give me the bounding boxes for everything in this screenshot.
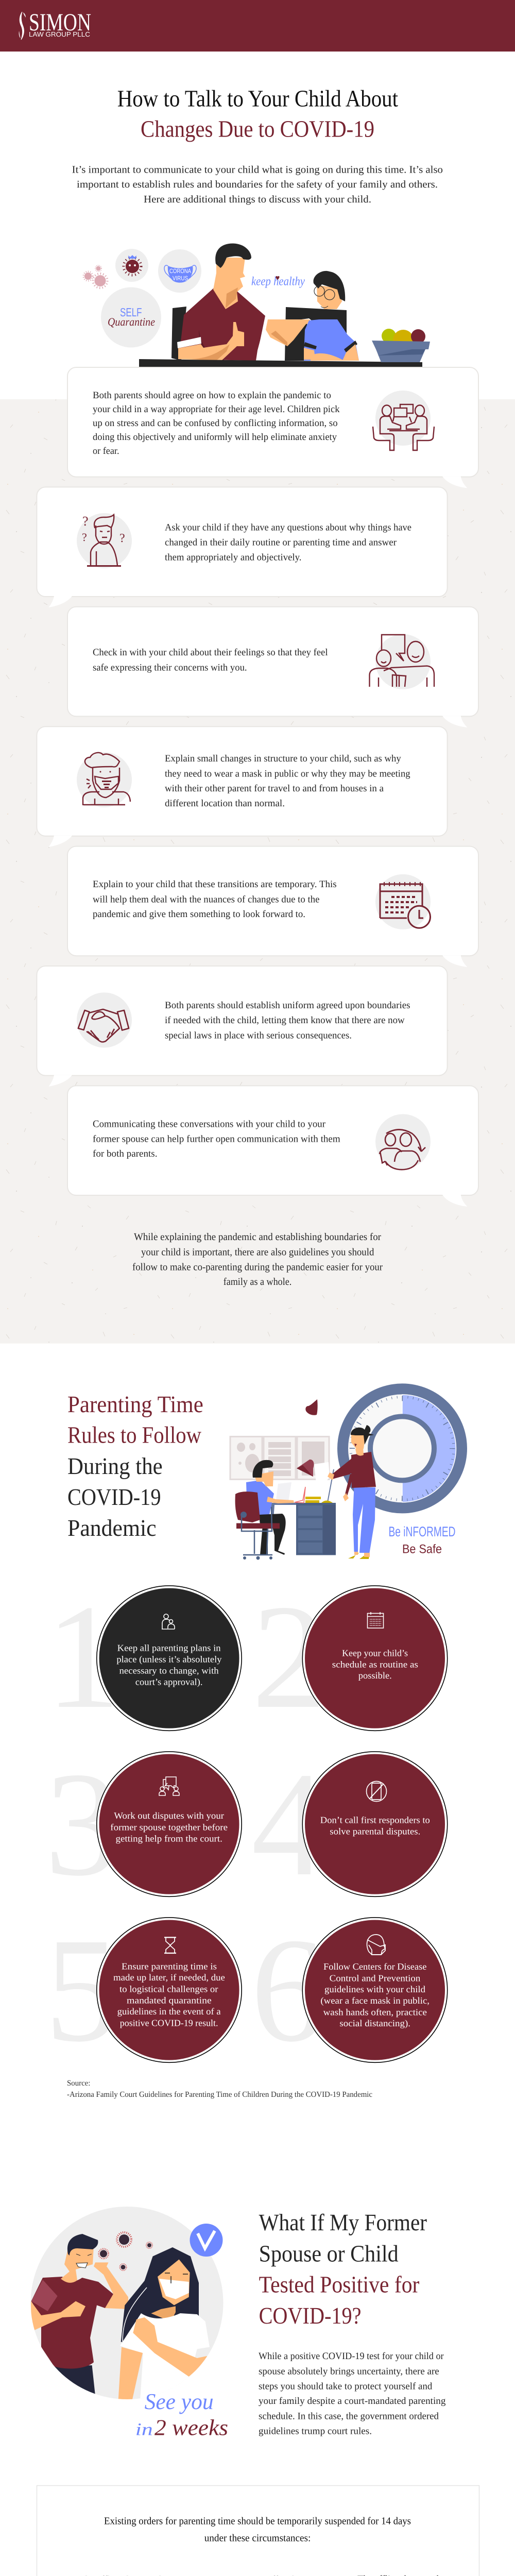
- card 2 text: [165, 522, 411, 563]
- rule 5 text: to logistical challenges or: [119, 1984, 218, 1994]
- icon: confused child: ?: [82, 514, 89, 529]
- card 5 text: pandemic and give them something to look forward to.: [93, 909, 305, 920]
- rule 5 text: Ensure parenting time is: [122, 1961, 217, 1971]
- icon: confused child: ?: [119, 532, 125, 545]
- card 7 text: former spouse can help further open communication with them: [93, 1133, 340, 1144]
- card 1 text: Both parents should agree on how to explain the pandemic to: [93, 390, 331, 401]
- rule 6 text: guidelines with your child: [324, 1984, 425, 1994]
- rule 5 text: [113, 1961, 225, 2028]
- icon: small viruses: [83, 265, 107, 288]
- heading: parenting time rules: COVID-19: [67, 1484, 161, 1510]
- background digits: 2: [252, 1574, 327, 1739]
- icon: corona virus mask bubble: VIRUS: [173, 275, 188, 282]
- closing text: While explaining the pandemic and establishing boundaries for: [134, 1231, 381, 1243]
- icon: hourglass: [164, 1937, 176, 1953]
- text: uncertainty paragraph: While a positive COVID-19 test for your child or: [259, 2351, 444, 2362]
- heading: parenting time rules: Pandemic: [67, 1515, 157, 1541]
- text: uncertainty paragraph: [259, 2351, 446, 2436]
- icon: corona virus mask bubble: CORONA: [169, 267, 191, 275]
- box heading: under these circumstances:: [204, 2533, 311, 2544]
- text: uncertainty paragraph: your family despite a court-mandated parenting: [259, 2396, 446, 2406]
- be informed lettering: Be Safe: [402, 1543, 442, 1556]
- rule 1 text: place (unless it’s absolutely: [116, 1654, 221, 1664]
- box heading: Existing orders for parenting time should be temporarily suspended for 14 days: [104, 2515, 411, 2527]
- rule 3 text: Work out disputes with your: [114, 1810, 224, 1821]
- big clock: [337, 1383, 467, 1513]
- card 1 text: up on stress and can be confused by conflicting information, so: [93, 418, 338, 429]
- icon: self quarantine bubble: SELF: [120, 306, 142, 319]
- icon: masked head: [367, 1935, 385, 1955]
- rule 3 text: [110, 1810, 228, 1843]
- card 2 text: changed in their daily routine or parenting time and answer: [165, 537, 397, 548]
- icon: two people at table: [373, 391, 434, 450]
- woman standing: [328, 1425, 376, 1559]
- desk with drawers: [271, 1503, 336, 1555]
- icon: confused child: ?: [82, 531, 87, 544]
- text: uncertainty paragraph: schedule. In this case, the government ordered: [259, 2411, 439, 2421]
- rule 2 text: [332, 1648, 418, 1681]
- rule 6 text: wash hands often, practice: [323, 2007, 427, 2017]
- icon: check badge: [190, 2224, 222, 2257]
- card 5 text: Explain to your child that these transitions are temporary. This: [93, 879, 337, 890]
- icon: two people and arrows: [375, 1114, 431, 1170]
- rule 5 text: made up later, if needed, due: [113, 1972, 225, 1982]
- background digits: 5: [45, 1907, 119, 2073]
- rule 1 circle: [97, 1586, 242, 1731]
- rule 6 text: social distancing).: [339, 2018, 410, 2028]
- rule 2 text: possible.: [358, 1670, 392, 1681]
- see you in 2 weeks lettering: 2 weeks: [154, 2415, 228, 2441]
- rule 3 text: former spouse together before: [110, 1822, 228, 1832]
- intro text: important to establish rules and boundaries for the safety of your family and others.: [77, 179, 438, 190]
- father: [177, 243, 318, 361]
- see you in 2 weeks lettering: in: [135, 2420, 153, 2439]
- illustration: office with clock: [230, 1383, 467, 1560]
- card 1 text: your child in a way appropriate for their age level. Children pick: [93, 404, 340, 415]
- rule 4 text: [320, 1815, 430, 1837]
- illustration: couple with mask: [31, 2207, 228, 2441]
- icon: calendar and clock: [375, 874, 431, 929]
- icon: corona virus mask bubble: [158, 249, 201, 293]
- background digits: 4: [251, 1741, 326, 1907]
- rule 3 text: getting help from the court.: [115, 1833, 222, 1843]
- icon: crowned virus bubble: [115, 249, 148, 282]
- rule 5 circle: [97, 1918, 242, 2062]
- icon: self quarantine bubble: [101, 287, 161, 347]
- card 1: [67, 367, 478, 488]
- card 1 text: doing this objectively and uniformly will help eliminate anxiety: [93, 432, 337, 443]
- card 2 text: Ask your child if they have any questions about why things have: [165, 522, 411, 533]
- rule 4 circle: [302, 1752, 448, 1896]
- card 2 text: them appropriately and objectively.: [165, 552, 302, 563]
- icon: self quarantine bubble: Quarantine: [108, 315, 155, 328]
- card 4 text: with their other parent for travel to and from houses in a: [165, 783, 384, 794]
- card 7 text: [93, 1118, 340, 1159]
- heading: parenting time rules: Rules to Follow: [67, 1421, 202, 1448]
- rule 2 text: schedule as routine as: [332, 1659, 418, 1669]
- rule 4 text: solve parental disputes.: [330, 1826, 420, 1837]
- card 7 text: Communicating these conversations with your child to your: [93, 1118, 326, 1129]
- icon: handshake: [77, 992, 132, 1048]
- heading: tested positive: What If My Former: [259, 2209, 427, 2235]
- title: How to Talk to Your Child About: [117, 85, 398, 111]
- card 6: [37, 966, 448, 1087]
- rule 4 text: Don’t call first responders to: [320, 1815, 430, 1825]
- card 3 text: Check in with your child about their feelings so that they feel: [93, 647, 328, 658]
- heading: parenting time rules: During the: [67, 1453, 163, 1479]
- rule 1 text: court’s approval).: [135, 1676, 203, 1687]
- chair backs: [171, 307, 347, 361]
- child: [304, 271, 359, 361]
- card 4 text: Explain small changes in structure to your child, such as why: [165, 753, 401, 764]
- card 5 text: [93, 879, 337, 920]
- logo: Simon Law Group: SIMON: [29, 9, 91, 36]
- rule 3 circle: [97, 1752, 242, 1896]
- rule 6 text: Control and Prevention: [330, 1973, 420, 1983]
- card 5: [67, 846, 478, 967]
- source note: rules: Source:: [67, 2079, 90, 2088]
- card 6 text: special laws in place with serious consequences.: [165, 1030, 352, 1041]
- background digits: 6: [251, 1907, 325, 2073]
- heading: tested positive: Spouse or Child: [259, 2240, 399, 2266]
- card 4 text: different location than normal.: [165, 798, 285, 809]
- card 7: [67, 1086, 478, 1207]
- wall panels: [230, 1436, 329, 1479]
- intro text: Here are additional things to discuss with your child.: [144, 194, 371, 205]
- card 4 text: [165, 753, 410, 809]
- title: Changes Due to COVID-19: [141, 116, 374, 142]
- closing text: family as a whole.: [224, 1276, 291, 1287]
- panel: suspension circumstances: [37, 2485, 479, 2576]
- heading: parenting time rules: [67, 1391, 203, 1541]
- source note: rules: -Arizona Family Court Guidelines for Parenting Time of Children During the COVID-19 Pandemic: [67, 2090, 372, 2099]
- background digits: 3: [45, 1741, 119, 1907]
- see you in 2 weeks lettering: [135, 2389, 228, 2441]
- icon: parent and child: [162, 1614, 175, 1629]
- logo: Simon Law Group: LAW GROUP PLLC: [29, 30, 90, 38]
- text: uncertainty paragraph: steps you should take to protect yourself and: [259, 2381, 433, 2392]
- fruit bowl: [372, 329, 430, 362]
- heading: tested positive: COVID-19?: [259, 2302, 362, 2329]
- icon: parent and child faces: [370, 634, 434, 689]
- source note: rules: [67, 2079, 372, 2099]
- be informed lettering: Be iNFORMED: [388, 1524, 455, 1539]
- rule 6 text: (wear a face mask in public,: [320, 1995, 430, 2006]
- rule 1 text: necessary to change, with: [119, 1665, 219, 1675]
- paper background: section one: [0, 399, 515, 1344]
- logo: Simon Law Group: [19, 9, 91, 40]
- card 1 text: or fear.: [93, 446, 119, 456]
- card 3: [67, 607, 478, 727]
- box heading: [104, 2515, 411, 2544]
- card 6 text: Both parents should establish uniform agreed upon boundaries: [165, 1000, 410, 1011]
- be informed lettering: [388, 1524, 455, 1556]
- rule 5 text: mandated quarantine: [127, 1995, 212, 2005]
- woman in mask: [118, 2247, 210, 2401]
- rule 1 text: [116, 1642, 221, 1687]
- card 6 text: [165, 1000, 410, 1041]
- illustration: father talking with child: [83, 243, 430, 367]
- coughing man: [31, 2234, 128, 2396]
- rule 6 circle: [302, 1918, 448, 2062]
- background digits: 1: [46, 1574, 121, 1739]
- rule 5 text: positive COVID-19 result.: [120, 2018, 218, 2028]
- rule 1 text: Keep all parenting plans in: [117, 1642, 221, 1653]
- card 2: [37, 487, 448, 607]
- icon: masked person: [77, 752, 132, 807]
- intro text: [72, 164, 443, 205]
- heading: tested positive: Tested Positive for: [259, 2271, 419, 2298]
- rule 6 text: [320, 1961, 430, 2028]
- header band: [0, 0, 515, 52]
- rule 2 circle: [302, 1586, 448, 1731]
- card 3 text: safe expressing their concerns with you.: [93, 662, 247, 673]
- background circle: [31, 2207, 224, 2399]
- rule 2 text: Keep your child’s: [342, 1648, 408, 1658]
- closing text: follow to make co-parenting during the pandemic easier for your: [132, 1261, 383, 1273]
- heading: tested positive: [259, 2209, 427, 2329]
- text: uncertainty paragraph: spouse absolutely brings uncertainty, there are: [259, 2366, 439, 2377]
- icon: viruses: [99, 2232, 152, 2270]
- see you in 2 weeks lettering: See you: [145, 2389, 214, 2414]
- icon: confused child: [77, 513, 132, 568]
- lamp and desk items: [276, 1460, 334, 1503]
- closing text: [132, 1231, 383, 1287]
- card 7 text: for both parents.: [93, 1148, 158, 1159]
- card 1 text: [93, 390, 340, 456]
- card 6 text: if needed with the child, letting them know that there are now: [165, 1015, 405, 1026]
- heading: parenting time rules: Parenting Time: [67, 1391, 203, 1417]
- background digits: [45, 1574, 327, 2073]
- card 4 text: they need to wear a mask in public or why they may be meeting: [165, 768, 410, 779]
- icon: two people talking: [159, 1777, 179, 1795]
- icon: no phone: [367, 1782, 386, 1801]
- card 3 text: [93, 647, 328, 673]
- card 5 text: will help them deal with the nuances of changes due to the: [93, 894, 319, 905]
- icon: calendar: [368, 1612, 383, 1628]
- intro text: It’s important to communicate to your child what is going on during this time. It’s also: [72, 164, 443, 175]
- rule 5 text: guidelines in the event of a: [117, 2006, 221, 2016]
- text: uncertainty paragraph: guidelines trump court rules.: [259, 2426, 372, 2436]
- man at desk: [235, 1460, 294, 1560]
- icon: heart: [305, 1399, 318, 1415]
- keep healthy lettering: keep healthy: [251, 275, 305, 289]
- rule 6 text: Follow Centers for Disease: [323, 1961, 426, 1972]
- closing text: your child is important, there are also guidelines you should: [141, 1247, 374, 1258]
- desk: [139, 359, 422, 367]
- title: [117, 85, 398, 142]
- card 4: [37, 726, 448, 847]
